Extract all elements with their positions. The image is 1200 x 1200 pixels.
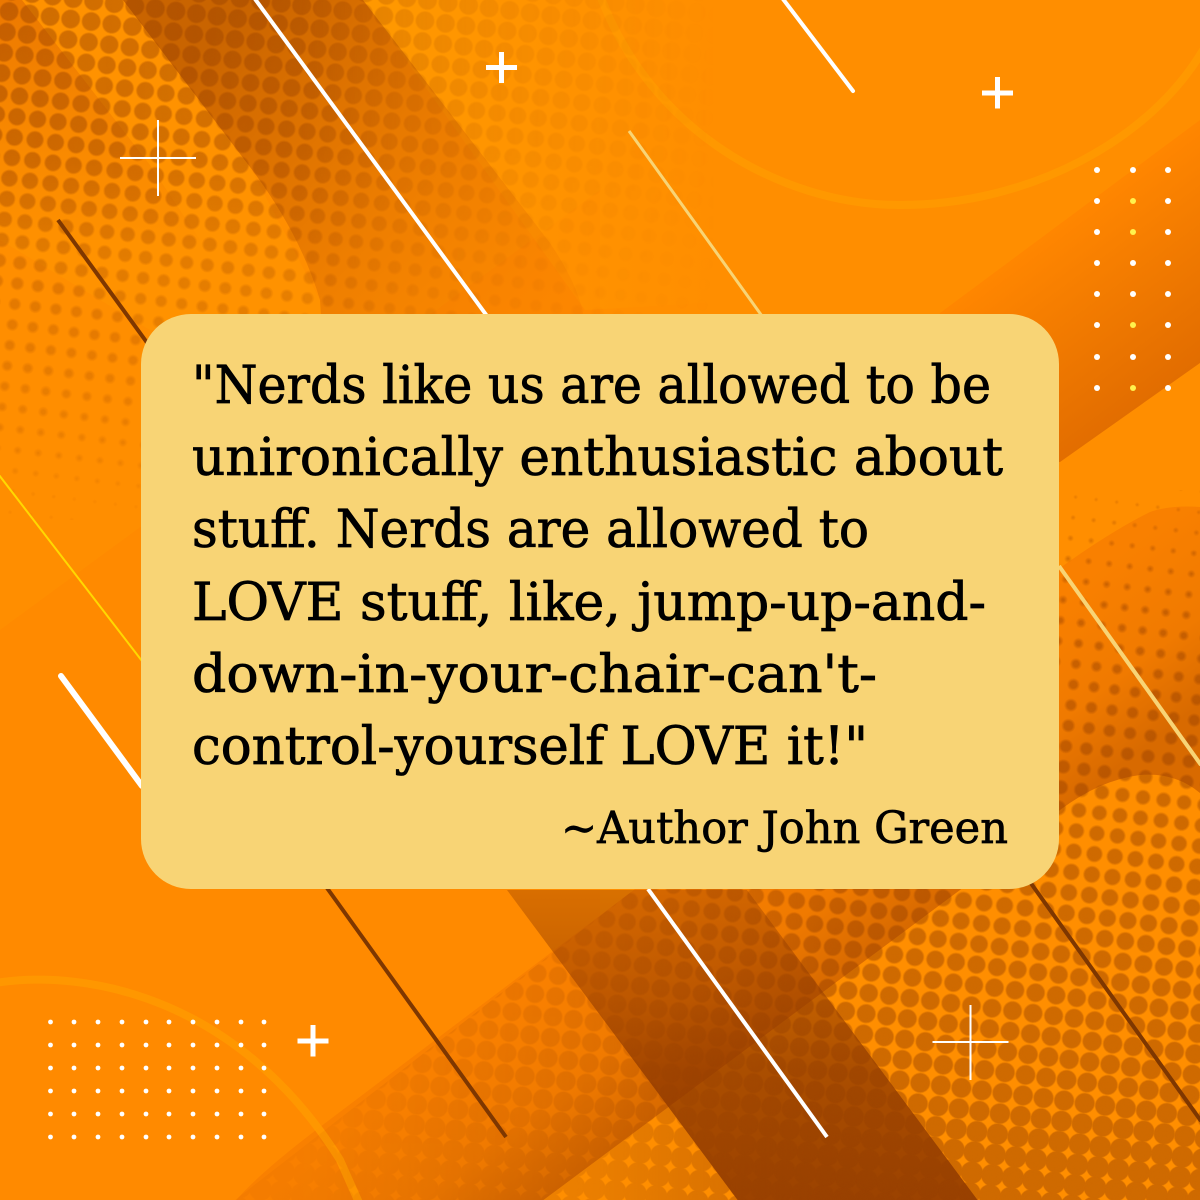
lower right darker rounded band [228,507,1200,1200]
quote text: unironically enthusiastic about [192,428,1003,488]
plus icons [120,52,1013,1080]
top diagonal dark band [123,0,586,330]
plus: top right [982,77,1013,108]
lower right light blob [530,775,1200,1200]
line: dark right [1030,882,1200,1121]
line: dark upper left [58,220,148,344]
halftone dots: top left [0,0,560,487]
quote text: "Nerds like us are allowed to be [192,356,991,416]
top right diagonal band [900,120,1200,462]
quote text: stuff. Nerds are allowed to [192,500,869,560]
line: white bottom [648,889,827,1137]
line: thin yellow left [0,475,142,661]
plus: bottom left [298,1025,328,1056]
quote text: control-yourself LOVE it!" [192,717,868,777]
attribution: ~Author John Green [561,804,1008,854]
dot grid: top right [1094,167,1171,391]
quote text [192,356,1003,777]
bottom arc [0,980,360,1200]
panel: quote card [141,314,1059,889]
line: white top right [783,0,853,91]
dot grid: bottom left [48,1020,266,1139]
line: pale yellow right [1059,566,1200,765]
quote text: down-in-your-chair-can't- [192,645,877,705]
quote text: LOVE stuff, like, jump-up-and- [192,573,986,633]
line: white thick left [61,676,142,786]
plus: top center [486,52,517,83]
lower diagonal dark band [507,890,985,1200]
plus: thin top left [120,120,196,196]
halftone dots: bottom right [354,490,1200,1200]
card background [141,314,1059,889]
line: white top left [255,0,487,316]
line: dark bottom [327,888,506,1137]
line: pale yellow top [629,131,762,316]
plus: thin bottom right [932,1005,1008,1080]
top arc [600,0,1200,205]
